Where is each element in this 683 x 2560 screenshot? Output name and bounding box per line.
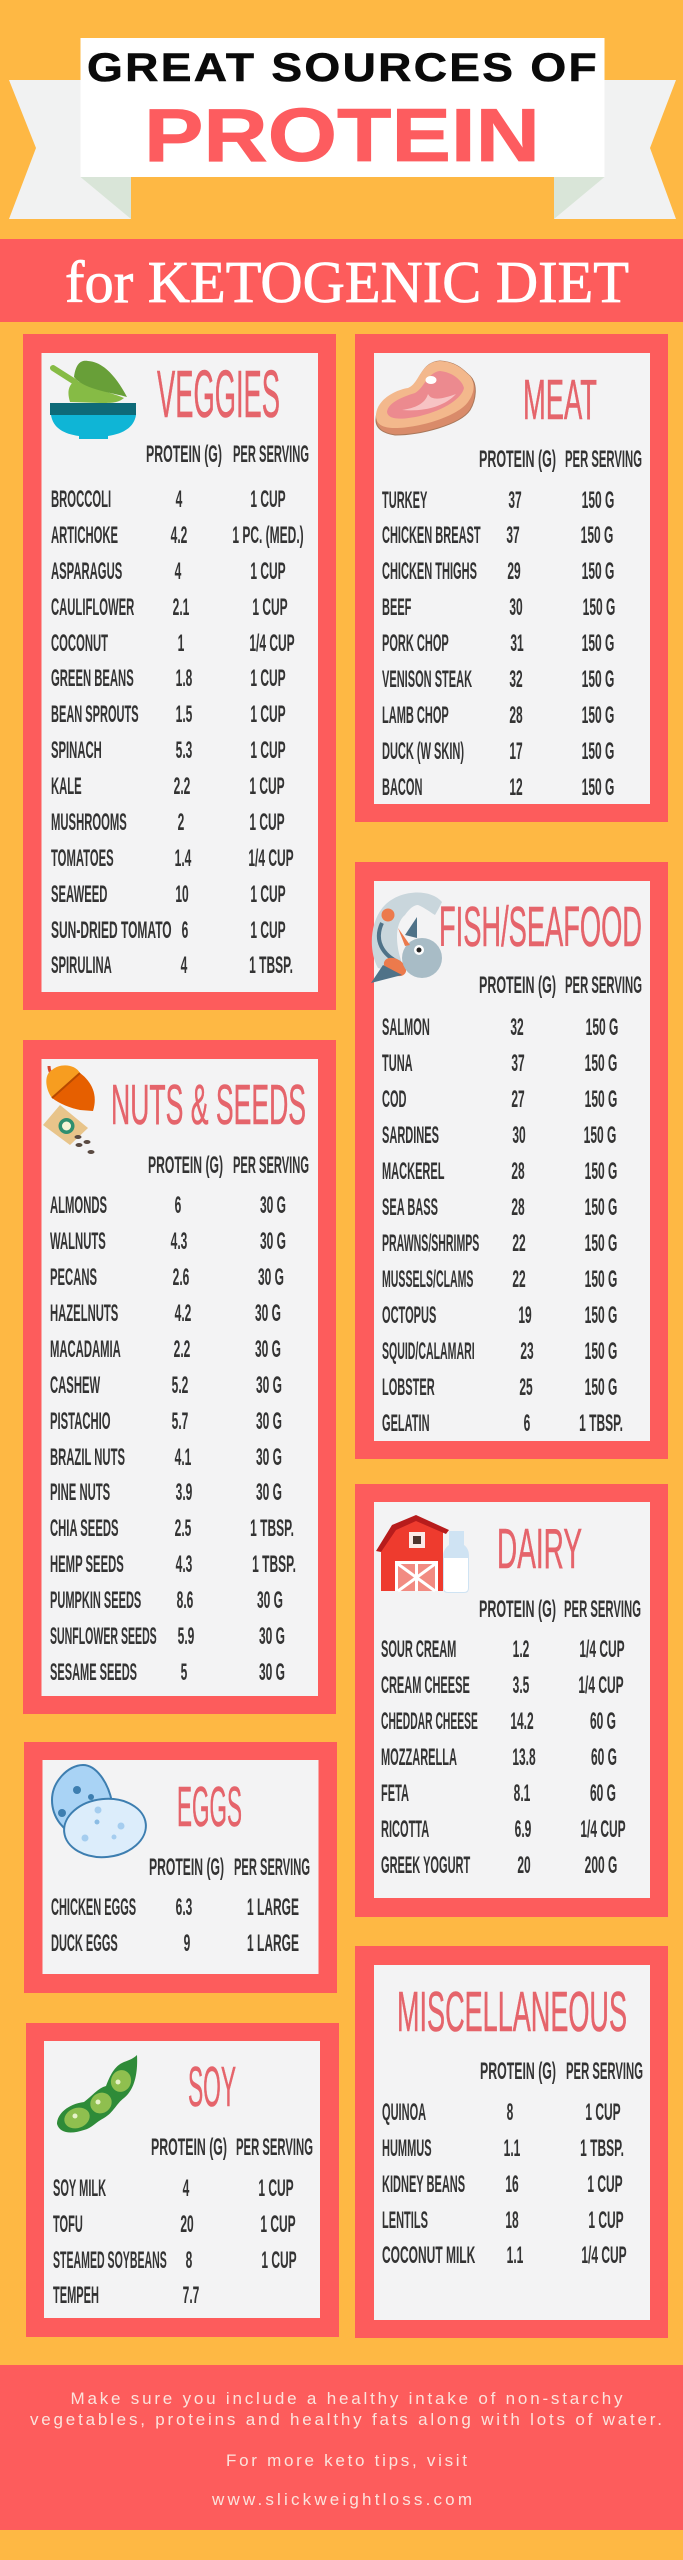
table: nuts and seeds: MACADAMIA [50,1335,121,1362]
table: nuts and seeds: HAZELNUTS [50,1299,118,1326]
table: fish and seafood: 150 G [585,1087,617,1113]
table: nuts and seeds: 1 TBSP. [250,1516,294,1542]
table: dairy: 1/4 CUP [579,1637,625,1663]
footer message [30,2389,662,2429]
panel: nuts and seeds: PER SERVING [233,1152,309,1179]
table: nuts and seeds: 2.2 [174,1337,190,1363]
table: eggs: 6.3 [176,1895,192,1921]
panel: nuts and seeds: NUTS & SEEDS [111,1073,306,1137]
table: fish and seafood [382,1013,623,1437]
table: veggies: 2.2 [174,774,190,800]
table: fish and seafood: 27 [511,1087,525,1113]
banner ribbon tail left [9,80,131,219]
table: nuts and seeds: 30 G [256,1373,282,1399]
column headers: PROTEIN (G) [480,2058,556,2085]
table: eggs: 1 LARGE [247,1895,299,1921]
table: fish and seafood: SQUID/CALAMARI [382,1337,475,1364]
table: meat: 37 [506,523,520,549]
table: nuts and seeds: PUMPKIN SEEDS [50,1586,141,1613]
table: soy: STEAMED SOYBEANS [53,2246,167,2273]
column headers: PROTEIN (G) [148,1152,223,1179]
table: nuts and seeds: 2.6 [173,1265,189,1291]
table: veggies: TOMATOES [51,844,114,871]
table: veggies: 1.4 [175,846,192,872]
table: veggies: 4 [176,487,183,513]
table: nuts and seeds: 30 G [256,1445,282,1471]
table: nuts and seeds: PINE NUTS [50,1478,110,1505]
table: dairy: GREEK YOGURT [381,1851,471,1878]
table: nuts and seeds: 4.2 [175,1301,191,1327]
table: meat: DUCK (W SKIN) [382,737,464,764]
table: veggies: GREEN BEANS [51,664,134,691]
table: fish and seafood: MUSSELS/CLAMS [382,1265,473,1292]
table: fish and seafood: 19 [518,1303,532,1329]
table: veggies: 1 CUP [250,666,286,692]
table: dairy: FETA [381,1779,409,1806]
table: fish and seafood: 150 G [585,1339,617,1365]
icon: barn and milk bottle [376,1515,469,1593]
table: fish and seafood: PRAWNS/SHRIMPS [382,1229,479,1256]
table: soy: 8 [186,2248,192,2274]
heading: protein: PROTEIN [144,93,540,177]
heading: great sources of: GREAT SOURCES OF [87,46,599,90]
table: nuts and seeds: 6 [175,1193,181,1219]
table: nuts and seeds: SUNFLOWER SEEDS [50,1622,157,1649]
icon: acorn and seed packet [43,1065,95,1154]
table: veggies: KALE [51,772,82,799]
table: miscellaneous [382,2098,627,2269]
table: dairy: MOZZARELLA [381,1743,457,1770]
table: fish and seafood: 23 [520,1339,534,1365]
table: fish and seafood: SALMON [382,1013,430,1040]
table: miscellaneous: 1 CUP [587,2172,623,2198]
table: nuts and seeds: ALMONDS [50,1191,107,1218]
panel: meat: MEAT [523,368,597,432]
table: soy: 1 CUP [258,2176,294,2202]
column headers: PROTEIN (G) [479,1596,556,1623]
table: veggies: SPINACH [51,736,102,763]
table: dairy: 8.1 [514,1781,531,1807]
table: fish and seafood: 150 G [585,1195,617,1221]
column headers: PROTEIN (G) [479,972,556,999]
table: meat: 150 G [582,631,614,657]
table: nuts and seeds: 30 G [256,1480,282,1506]
table: veggies: 1 TBSP. [249,953,293,979]
table: dairy: CREAM CHEESE [381,1671,470,1698]
table: fish and seafood: 32 [510,1015,524,1041]
table: nuts and seeds: PISTACHIO [50,1407,111,1434]
table: miscellaneous: 1 CUP [588,2208,624,2234]
table: eggs: CHICKEN EGGS [51,1893,136,1920]
table: nuts and seeds: PECANS [50,1263,97,1290]
table: fish and seafood: MACKEREL [382,1157,444,1184]
table: miscellaneous: 1/4 CUP [581,2243,627,2269]
table: fish and seafood: 6 [524,1411,530,1437]
table: nuts and seeds: 4.1 [175,1445,192,1471]
table: nuts and seeds: 30 G [260,1193,286,1219]
table: nuts and seeds: 30 G [260,1229,286,1255]
table: fish and seafood: 37 [511,1051,525,1077]
table: veggies: SEAWEED [51,880,107,907]
table: miscellaneous: 8 [507,2100,513,2126]
table: nuts and seeds: CASHEW [50,1371,100,1398]
panel: nuts and seeds [23,1040,336,1714]
table: fish and seafood: SARDINES [382,1121,439,1148]
table: fish and seafood: LOBSTER [382,1373,435,1400]
table: meat: 150 G [582,559,614,585]
table: nuts and seeds: 5.2 [172,1373,188,1399]
table: fish and seafood: 22 [512,1231,526,1257]
panel: soy: PER SERVING [236,2134,313,2161]
table: fish and seafood: SEA BASS [382,1193,438,1220]
panel: eggs [24,1742,337,1993]
table: veggies: 10 [175,882,189,908]
table: meat: BACON [382,773,422,800]
table: meat: 150 G [583,595,615,621]
table: nuts and seeds [50,1191,296,1686]
table: veggies: CAULIFLOWER [51,593,135,620]
table: eggs [51,1893,299,1957]
table: meat: 12 [509,775,523,801]
table: fish and seafood: 150 G [585,1375,617,1401]
table: meat: LAMB CHOP [382,701,449,728]
table: veggies: 4 [175,559,182,585]
table: miscellaneous: 18 [505,2208,519,2234]
banner ribbon tail right [554,80,676,219]
subtitle text: for KETOGENIC DIET [65,249,629,315]
table: veggies: 1 CUP [249,774,285,800]
table: soy: TOFU [53,2210,83,2237]
table: nuts and seeds: 30 G [258,1265,284,1291]
table: veggies: 2.1 [173,595,190,621]
table: dairy: 1/4 CUP [580,1817,626,1843]
table: miscellaneous: HUMMUS [382,2134,432,2161]
table: veggies: 1 CUP [250,882,286,908]
table: meat: 150 G [582,667,614,693]
table: dairy: 60 G [590,1709,616,1735]
table: dairy: RICOTTA [381,1815,429,1842]
table: dairy: 6.9 [515,1817,531,1843]
table: nuts and seeds: WALNUTS [50,1227,106,1254]
panel: veggies: PER SERVING [233,441,309,468]
table: veggies: MUSHROOMS [51,808,127,835]
table: veggies: 2 [178,810,184,836]
icon: leaf in bowl [50,361,136,439]
table: meat: PORK CHOP [382,629,449,656]
table: veggies: BROCCOLI [51,485,111,512]
icon: eggs [52,1765,149,1861]
panel: dairy [355,1484,668,1917]
table: veggies: 1/4 CUP [248,846,294,872]
table: veggies: 1 CUP [250,918,286,944]
table: miscellaneous: COCONUT MILK [382,2243,475,2269]
table: miscellaneous: 1 TBSP. [580,2136,624,2162]
banner white panel [80,38,604,177]
table: dairy: CHEDDAR CHEESE [381,1707,478,1734]
table: meat: 17 [509,739,523,765]
panel: soy: SOY [188,2055,236,2119]
table: veggies: 1 CUP [252,595,288,621]
table: fish and seafood: 28 [511,1195,525,1221]
panel: eggs: EGGS [177,1775,242,1839]
panel: miscellaneous [355,1946,668,2338]
icon: soybean pod [57,2055,137,2132]
table: veggies: 1 CUP [250,702,286,728]
table: soy: TEMPEH [53,2281,99,2308]
table: meat: 28 [509,703,523,729]
column headers: PROTEIN (G) [146,441,222,468]
table: veggies: 1 [178,631,185,657]
panel: meat [355,334,668,822]
footer band [0,2365,683,2530]
table: dairy: 60 G [590,1781,616,1807]
table: fish and seafood: 22 [512,1267,526,1293]
table: nuts and seeds: 8.6 [177,1588,193,1614]
panel: fish and seafood [355,862,668,1459]
column headers: PROTEIN (G) [151,2134,227,2161]
table: fish and seafood: 150 G [584,1123,616,1149]
table: veggies: 1.5 [176,702,193,728]
table: miscellaneous: 1.1 [504,2136,521,2162]
table: veggies: 1 CUP [250,559,286,585]
table: fish and seafood: 150 G [585,1303,617,1329]
table: veggies: 1 PC. (MED.) [232,523,304,549]
table: dairy: 14.2 [510,1709,534,1735]
table: dairy: SOUR CREAM [381,1635,456,1662]
table: eggs: 1 LARGE [247,1931,299,1957]
table: nuts and seeds: 30 G [255,1301,281,1327]
table: meat: 150 G [581,523,613,549]
table: meat [382,486,615,801]
table: nuts and seeds: 30 G [257,1588,283,1614]
table: soy: SOY MILK [53,2174,106,2201]
table: meat: 150 G [582,488,614,514]
table: fish and seafood: 150 G [586,1015,618,1041]
table: veggies: 1.8 [176,666,192,692]
table: meat: CHICKEN BREAST [382,521,481,548]
table: dairy: 1/4 CUP [578,1673,624,1699]
table: fish and seafood: TUNA [382,1049,413,1076]
table: veggies: BEAN SPROUTS [51,700,139,727]
table: meat: 29 [507,559,521,585]
table: soy: 4 [183,2176,190,2202]
table: veggies: 4 [181,953,188,979]
table: meat: 150 G [582,703,614,729]
title banner [9,38,676,219]
panel: veggies: VEGGIES [157,357,280,432]
table: fish and seafood: 150 G [585,1267,617,1293]
table: veggies: SUN-DRIED TOMATO [51,918,172,944]
table: veggies [51,485,304,979]
table: miscellaneous: 1 CUP [585,2100,621,2126]
table: nuts and seeds: HEMP SEEDS [50,1550,124,1577]
table: dairy: 1.2 [513,1637,529,1663]
table: fish and seafood: 150 G [585,1159,617,1185]
table: veggies: 1 CUP [249,810,285,836]
table: veggies: 5.3 [176,738,192,764]
table: miscellaneous: LENTILS [382,2206,428,2233]
banner fold right [554,177,604,219]
table: meat: 150 G [582,739,614,765]
table: nuts and seeds: 3.9 [176,1480,192,1506]
table: dairy: 3.5 [513,1673,530,1699]
table: nuts and seeds: BRAZIL NUTS [50,1443,125,1470]
table: soy [53,2174,297,2309]
table: nuts and seeds: 30 G [255,1337,281,1363]
table: meat: TURKEY [382,486,428,513]
table: nuts and seeds: CHIA SEEDS [50,1514,119,1541]
footer message: Make sure you include a healthy intake of non-starchy [70,2389,623,2408]
table: fish and seafood: COD [382,1085,407,1112]
table: meat: 30 [509,595,523,621]
table: eggs: 9 [184,1931,190,1957]
table: meat: BEEF [382,593,411,620]
table: dairy: 13.8 [512,1745,536,1771]
footer call to action: For more keto tips, visit [226,2451,467,2470]
table: soy: 20 [180,2212,194,2238]
table: veggies: 6 [182,918,188,944]
table: nuts and seeds: 4.3 [171,1229,187,1255]
table: dairy: 200 G [585,1853,617,1879]
table: fish and seafood: 30 [512,1123,526,1149]
table: nuts and seeds: 30 G [259,1624,285,1650]
table: nuts and seeds: 1 TBSP. [252,1552,296,1578]
footer website: www.slickweightloss.com [211,2490,472,2509]
table: veggies: 4.2 [171,523,187,549]
table: dairy [381,1635,626,1879]
table: veggies: 1/4 CUP [249,631,295,657]
table: meat: 32 [509,667,523,693]
icon: steak [376,361,475,435]
table: soy: 1 CUP [261,2248,297,2274]
table: soy: 7.7 [183,2283,199,2309]
table: meat: VENISON STEAK [382,665,472,692]
panel: veggies [23,334,336,1010]
table: meat: CHICKEN THIGHS [382,557,477,584]
table: miscellaneous: QUINOA [382,2098,426,2125]
table: nuts and seeds: 30 G [259,1660,285,1686]
table: veggies: COCONUT [51,629,108,656]
table: fish and seafood: 1 TBSP. [579,1411,623,1437]
panel: soy [26,2023,339,2337]
table: veggies: 1 CUP [250,487,286,513]
table: nuts and seeds: 5 [181,1660,188,1686]
table: fish and seafood: GELATIN [382,1409,430,1436]
table: miscellaneous: 16 [505,2172,519,2198]
table: fish and seafood: 28 [511,1159,525,1185]
table: dairy: 20 [517,1853,531,1879]
table: soy: 1 CUP [260,2212,296,2238]
table: nuts and seeds: 5.7 [172,1409,188,1435]
footer message: vegetables, proteins and healthy fats along with lots of water. [30,2410,662,2429]
panel: dairy: DAIRY [497,1517,582,1581]
table: nuts and seeds: SESAME SEEDS [50,1658,137,1685]
table: veggies: SPIRULINA [51,951,112,978]
table: dairy: 60 G [591,1745,617,1771]
table: veggies: ASPARAGUS [51,557,122,584]
column headers: PROTEIN (G) [479,446,556,473]
panel: eggs: PER SERVING [234,1854,310,1881]
column headers: PROTEIN (G) [149,1854,224,1881]
table: miscellaneous: KIDNEY BEANS [382,2170,465,2197]
table: fish and seafood: 150 G [585,1231,617,1257]
table: veggies: 1 CUP [250,738,286,764]
table: fish and seafood: OCTOPUS [382,1301,436,1328]
table: nuts and seeds: 30 G [256,1409,282,1435]
table: miscellaneous: 1.1 [507,2243,524,2269]
banner fold left [80,177,131,219]
table: meat: 37 [508,488,522,514]
subtitle band [0,239,683,322]
table: eggs: DUCK EGGS [51,1929,118,1956]
table: nuts and seeds: 4.3 [176,1552,192,1578]
table: nuts and seeds: 5.9 [178,1624,194,1650]
table: fish and seafood: 150 G [585,1051,617,1077]
table: veggies: ARTICHOKE [51,521,118,548]
table: meat: 31 [510,631,524,657]
table: meat: 150 G [582,775,614,801]
table: fish and seafood: 25 [519,1375,533,1401]
table: nuts and seeds: 2.5 [175,1516,192,1542]
icon: koi fish [371,893,442,983]
